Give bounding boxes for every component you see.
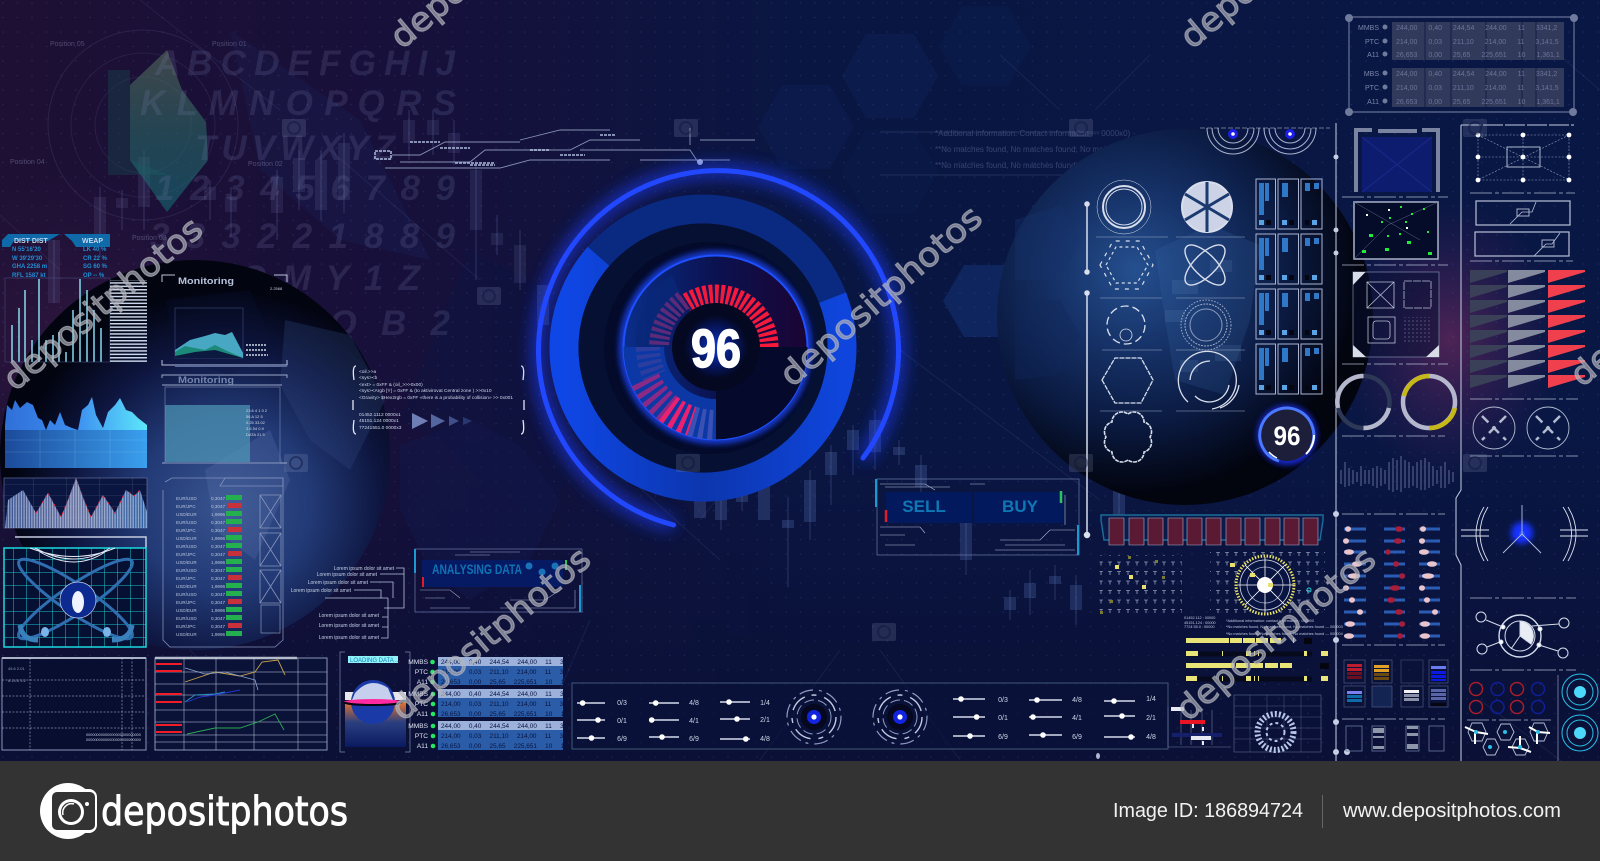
watermarks: depositphotos — [772, 197, 990, 394]
radar with position labels: Position 02 — [248, 161, 283, 168]
exchange table panel: USD/EUR — [176, 536, 197, 541]
exchange table panel: 1,9996 — [211, 608, 225, 613]
speedometer ticks — [645, 295, 768, 425]
panel: distance readout tabs: OP -- % — [83, 273, 105, 279]
panel: distance readout tabs: N 55'16'20 — [12, 247, 42, 253]
small 96 badge — [1257, 405, 1317, 465]
corner square panel — [1353, 272, 1439, 357]
top right data table: MMBS — [1358, 25, 1379, 32]
exchange table panel: 0,3047 — [211, 624, 225, 629]
circuit lines — [375, 128, 755, 168]
code readout box: <ext> = 0xFF & (oil_>>>0x00) — [359, 382, 423, 388]
exchange table panel: EUR/JPC — [176, 528, 196, 533]
exchange table panel: EUR/USD — [176, 544, 197, 549]
outline boxes — [1475, 201, 1570, 256]
top right data table: 244,00 0,40 244,54 244,00 11 3341,2 — [1396, 25, 1557, 32]
top right data table: PTC — [1365, 85, 1379, 92]
panel: distance readout tabs: CR 22 % — [83, 256, 108, 262]
code readout box — [353, 366, 524, 434]
radar with position labels — [10, 30, 283, 242]
exchange table panel: USD/EUR — [176, 608, 197, 613]
small info text: 01452.112 : 00000 — [1184, 616, 1215, 620]
sell buy panel — [876, 479, 1079, 555]
blue waveform chart — [5, 397, 147, 468]
slider panel: 6/9 — [1072, 734, 1082, 741]
node panel — [1461, 125, 1574, 182]
exchange table panel: USD/EUR — [176, 512, 197, 517]
slider panel: 2/1 — [760, 717, 770, 724]
watermarks: depositphotos — [0, 209, 210, 398]
exchange table panel: EUR/JPC — [176, 576, 196, 581]
loading data globe: LOADING DATA ... — [350, 658, 400, 664]
exchange table panel: USD/EUR — [176, 584, 197, 589]
monitoring panel 1 — [162, 275, 287, 366]
color swatches — [1344, 660, 1448, 707]
icon: depositphotos logo — [40, 783, 97, 839]
lorem ipsum callouts: Lorem ipsum dolor sit amet — [317, 572, 378, 578]
top right data table: 26,653 0,00 25,65 225,651 10 1,361,1 — [1396, 99, 1560, 106]
colored circles — [1470, 682, 1544, 714]
slider panel: 4/1 — [1072, 715, 1082, 722]
ghost alphabet — [140, 44, 457, 343]
candlestick chart — [48, 110, 1237, 625]
monitoring panel 2: 3.6 54 0.9 — [246, 426, 265, 431]
exchange table panel: EUR/JPC — [176, 552, 196, 557]
background hexagons — [758, 6, 1031, 337]
data table bottom: 214,00 0,03 211,10 214,00 11 3,141,5 — [441, 733, 581, 740]
small info text: *No matches found, No matches found, No matches found --- 000004 — [1226, 632, 1343, 636]
data table bottom: 214,00 0,03 211,10 214,00 11 3,141,5 — [441, 669, 581, 676]
network diagram — [1476, 612, 1569, 658]
exchange table panel: 0,3047 — [211, 576, 225, 581]
exchange table panel: 0,3047 — [211, 528, 225, 533]
icon: broken rings — [1178, 351, 1239, 409]
monitoring panel 2: 23.6 4 1 0 2 — [246, 408, 268, 413]
exchange table panel: 1,9996 — [211, 512, 225, 517]
additional information lines: **No matches found, No matches found, No matches found --- 0000x3 — [935, 161, 1184, 170]
code readout box: 45151.124 0000x1 — [359, 418, 399, 424]
watermarks: depositphotos — [1168, 539, 1383, 728]
monitoring panel 1: 2.2568 — [270, 286, 283, 291]
outer spiral glow arc — [538, 171, 898, 525]
ghost alphabet: 3 3 3 2 2 1 8 8 9 — [150, 217, 456, 256]
progress rings — [1337, 376, 1455, 428]
small info text: 7724 55.0 : 00000 — [1184, 625, 1215, 629]
exchange table panel: EUR/USD — [176, 592, 197, 597]
footer dot — [1096, 753, 1100, 759]
lorem ipsum callouts: Lorem ipsum dolor sit amet — [334, 566, 395, 572]
exchange table panel: USD/EUR — [176, 632, 197, 637]
dot grid with markers — [1100, 555, 1182, 615]
data grid panel: 8.14.6 3.2 — [8, 678, 27, 683]
code readout box: <oil.>>a — [359, 369, 377, 375]
target crosshair — [1461, 505, 1588, 561]
striped mountain chart — [4, 478, 147, 528]
code readout box: 01452.1112 0000x1 — [359, 412, 401, 418]
ghost alphabet: K L M N O P Q R S — [140, 84, 456, 123]
panel: distance readout tabs: RFL 1587 kt — [12, 273, 46, 279]
exchange table panel: 1,9996 — [211, 560, 225, 565]
blue bracket panel — [1356, 130, 1438, 192]
icon: hex wheel — [1182, 182, 1232, 232]
exchange table panel: EUR/USD — [176, 496, 197, 501]
radar with position labels: Position 05 — [50, 41, 85, 48]
monitoring panel 1: Monitoring — [178, 276, 234, 287]
top right data table: 214,00 0,03 211,10 214,00 11 3,141,5 — [1396, 39, 1559, 46]
lorem ipsum callouts — [291, 566, 404, 641]
data grid panel: 00000000000000000000000000 — [86, 738, 141, 742]
gauge value: 96 — [691, 319, 741, 379]
icon: dashed hexagon — [1100, 241, 1153, 289]
column dividers — [1334, 123, 1578, 761]
loading data globe — [340, 652, 410, 752]
panel: distance readout tabs — [2, 234, 110, 279]
icon: ring — [1097, 180, 1151, 234]
slider panel: 0/3 — [617, 700, 627, 707]
thick blue ring — [550, 195, 856, 501]
small info text: 45151.124 : 00000 — [1184, 621, 1216, 625]
small boxes — [1346, 726, 1444, 751]
icon: scalloped flower — [1104, 412, 1152, 462]
data table bottom: 244,00 0,40 244,54 244,00 11 3341,2 — [441, 659, 580, 666]
right globe — [997, 129, 1373, 505]
exchange table panel: EUR/USD — [176, 520, 197, 525]
slider panel: 0/1 — [617, 718, 627, 725]
exchange table panel — [163, 478, 283, 647]
vertical indicator lines — [1084, 202, 1090, 538]
multi-line chart panel — [155, 658, 327, 750]
panel: distance readout tabs: SG 60 % — [83, 264, 108, 270]
panel: distance readout tabs: WEAP — [82, 238, 103, 245]
exchange table panel: 1,9996 — [211, 632, 225, 637]
data table bottom: MMBS — [408, 691, 429, 698]
monitoring panel 2 — [162, 375, 287, 463]
exchange table panel: 1,9996 — [211, 584, 225, 589]
watermarks: depositphotos — [383, 539, 598, 728]
top eyes — [1200, 128, 1330, 154]
row sliders — [1343, 526, 1440, 639]
radar with position labels: Position 04 — [10, 159, 45, 166]
additional information lines: *Additional information: Contact information --- 0000x0) — [935, 129, 1131, 138]
additional information lines: **No matches found, No matches found, No matches found --- 0000x3 — [935, 145, 1184, 154]
data table bottom — [408, 657, 582, 750]
slider panel: 6/9 — [998, 734, 1008, 741]
atom grid panel — [4, 537, 146, 649]
radar with position labels: Position 03 — [132, 235, 167, 242]
green dots radar panel — [1354, 202, 1438, 259]
logo wordmark: depositphotos — [101, 789, 348, 835]
top right data table: A11 — [1367, 52, 1379, 59]
panel: distance readout tabs: GHA 2258 m — [12, 264, 47, 270]
lorem ipsum callouts: Lorem ipsum dolor sit amet — [319, 623, 380, 629]
code readout box: <sys><b — [359, 375, 378, 381]
exchange table panel: 0,3047 — [211, 592, 225, 597]
slider panel: 1/4 — [760, 700, 770, 707]
yellow radar in dot grid — [1210, 552, 1325, 615]
slider panel — [572, 683, 1168, 749]
inner dark well — [578, 224, 828, 472]
panel: distance readout tabs: W 39'29'30 — [12, 256, 43, 262]
cyan rings — [1558, 674, 1598, 761]
exchange table panel: 0,3047 — [211, 600, 225, 605]
ghost alphabet: A B C D E F G H I J — [154, 44, 457, 83]
radial dot chart — [1234, 695, 1321, 752]
analysing data panel: ANALYSING DATA — [432, 561, 522, 577]
data grid panel: 45.6 2.01 — [8, 666, 25, 671]
exchange table panel: EUR/JPC — [176, 504, 196, 509]
data table bottom: MMBS — [408, 659, 429, 666]
icon: hexagon — [1102, 358, 1153, 403]
data table bottom: A11 — [417, 743, 428, 750]
radar with position labels: Position 01 — [212, 41, 247, 48]
slider panel: 0/1 — [998, 715, 1008, 722]
bar chart — [5, 278, 147, 362]
top right data table: 244,00 0,40 244,54 244,00 11 3341,2 — [1396, 71, 1557, 78]
data table bottom: 214,00 0,03 211,10 214,00 11 3,141,5 — [441, 701, 581, 708]
small info text — [1184, 616, 1343, 636]
exchange table panel: EUR/USD — [176, 568, 197, 573]
exchange table panel: USD/EUR — [176, 560, 197, 565]
data table bottom: 244,00 0,40 244,54 244,00 11 3341,2 — [441, 691, 580, 698]
slider panel: 4/8 — [760, 736, 770, 743]
sell buy panel: BUY — [1002, 497, 1039, 516]
data table bottom: PTC — [415, 701, 428, 708]
left globe — [0, 260, 390, 650]
red cells strip — [1101, 515, 1323, 545]
top right data table: PTC — [1365, 39, 1379, 46]
monitoring panel 2: 0.25 33.02 — [246, 420, 266, 425]
lorem ipsum callouts: Lorem ipsum dolor sit amet — [308, 580, 369, 586]
analysing data panel — [415, 549, 582, 612]
icon: dotted ring — [1181, 300, 1231, 350]
data table bottom: PTC — [415, 733, 428, 740]
exchange table panel: 0,3047 — [211, 520, 225, 525]
fan icons — [1473, 407, 1569, 449]
data table bottom: 26,653 0,00 25,65 225,651 10 1,361,1 — [441, 679, 582, 686]
small info text: *No matches found, No matches found, No matches found --- 000003 — [1226, 625, 1343, 629]
monitoring panel 2: DATA 21 5 — [246, 432, 266, 437]
circular gauge — [538, 171, 898, 525]
data table bottom: MMBS — [408, 723, 429, 730]
exchange table panel: 0,3047 — [211, 496, 225, 501]
slider panel: 4/8 — [1146, 734, 1156, 741]
slider panel: 0/3 — [998, 697, 1008, 704]
hex drone icons — [1465, 723, 1550, 755]
exchange table panel: EUR/USD — [176, 616, 197, 621]
radar polygon — [130, 50, 208, 212]
data table bottom: PTC — [415, 669, 428, 676]
exchange table panel: 0,3047 — [211, 616, 225, 621]
footer banner — [0, 761, 1600, 861]
red white bar chart — [1168, 707, 1231, 747]
ghost alphabet: C O B 2 — [280, 304, 451, 343]
slider panel: 4/8 — [689, 700, 699, 707]
panel: distance readout tabs: DIST DIST — [14, 238, 49, 245]
slider panel: 4/8 — [1072, 697, 1082, 704]
waveform strip — [1341, 456, 1453, 492]
website: www.depositphotos.com — [1342, 800, 1561, 822]
code readout box: <Gravity> $Hex2rgb = 0xFF «there is a probability of collision» >> 0x001 — [359, 395, 513, 401]
exchange table panel: 0,3047 — [211, 552, 225, 557]
code readout box: <sys><Argb [Y] = 0xFF & (to aktivirovat Central zone ) >>0x10 — [359, 388, 492, 394]
icon: dashed circle — [1107, 306, 1145, 344]
exchange table panel: 1,9996 — [211, 536, 225, 541]
monitoring panel 2: 56 A 12 5 — [246, 414, 263, 419]
small 96 badge: 96 — [1274, 421, 1300, 451]
data table bottom: A11 — [417, 679, 428, 686]
top right data table: A11 — [1367, 99, 1379, 106]
ghost alphabet: 1 2 3 4 5 6 7 8 9 — [155, 169, 456, 208]
image id: Image ID: 186894724 — [1113, 800, 1303, 822]
data table bottom: 26,653 0,00 25,65 225,651 10 1,361,1 — [441, 711, 582, 718]
exchange table panel: 0,3047 — [211, 568, 225, 573]
slider panel: 2/1 — [1146, 715, 1156, 722]
ghost alphabet: A O M Y 1 Z — [199, 259, 422, 298]
slider panel: 4/1 — [689, 718, 699, 725]
lorem ipsum callouts: Lorem ipsum dolor sit amet — [319, 613, 380, 619]
watermark camera icons — [282, 119, 1487, 641]
ghost alphabet: T U V W X Y Z — [195, 129, 397, 168]
exchange table panel: 0,3047 — [211, 504, 225, 509]
data grid panel: 00000000000000000000000000 — [86, 733, 141, 737]
slider panel: 6/9 — [689, 736, 699, 743]
sell buy panel: SELL — [902, 497, 946, 516]
data table bottom: 26,653 0,00 25,65 225,651 10 1,361,1 — [441, 743, 582, 750]
lorem ipsum callouts: Lorem ipsum dolor sit amet — [319, 635, 380, 641]
yellow data bars — [1186, 638, 1329, 681]
data table bottom: 244,00 0,40 244,54 244,00 11 3341,2 — [441, 723, 580, 730]
exchange table panel: 0,3047 — [211, 544, 225, 549]
slider panel: 1/4 — [1146, 696, 1156, 703]
lorem ipsum callouts: Lorem ipsum dolor sit amet — [291, 588, 352, 594]
large world map shape — [400, 420, 560, 600]
gauge value — [672, 303, 760, 391]
exchange table panel: EUR/JPC — [176, 624, 196, 629]
top right data table: 214,00 0,03 211,10 214,00 11 3,141,5 — [1396, 85, 1559, 92]
small info text: *Additional information: contact information : 000000 — [1226, 619, 1314, 623]
slider panel: 6/9 — [617, 736, 627, 743]
icon: petal cross — [1179, 239, 1231, 291]
icon grid — [1084, 180, 1245, 538]
top right data table — [1345, 14, 1578, 116]
data table bottom: A11 — [417, 711, 428, 718]
code readout box: 77241551.0 0000x3 — [359, 425, 402, 431]
top right data table: MBS — [1364, 71, 1379, 78]
exchange table panel: EUR/JPC — [176, 600, 196, 605]
monitoring panel 2: Monitoring — [178, 375, 234, 386]
panel: distance readout tabs: LK 40 % — [83, 247, 107, 253]
data grid panel — [2, 658, 146, 750]
small monitor panels — [1256, 179, 1322, 394]
additional information lines — [880, 129, 1184, 175]
wedge columns — [1470, 270, 1585, 388]
top right data table: 26,653 0,00 25,65 225,651 10 1,361,1 — [1396, 52, 1560, 59]
